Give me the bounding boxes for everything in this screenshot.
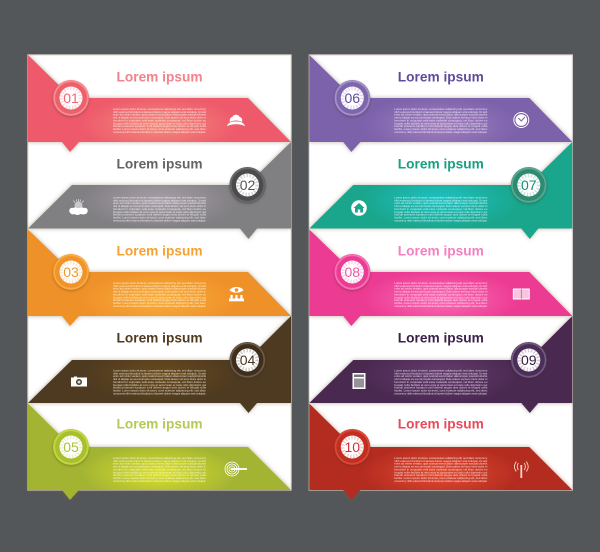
badge 02: 02 bbox=[240, 177, 255, 193]
icon: camera bbox=[71, 376, 87, 386]
step 01 bbox=[28, 55, 291, 152]
ribbon 08 bbox=[309, 230, 572, 326]
body text 08: nonummy nibh euismod tincidunt ut laoreet dolore magna aliquam erat volutpat. bbox=[394, 304, 487, 308]
badge 09 bbox=[511, 342, 547, 378]
heading 09: Lorem ipsum bbox=[398, 330, 484, 346]
body text 05: blandit praesent luptatum zzril delenit augue duis dolore te feugait nulla bbox=[113, 473, 206, 477]
body text 10: enim ad minim veniam, quis nostrud exerci tation ullamcorper suscipit lobortis bbox=[394, 462, 488, 466]
body text 09: hendrerit in vulputate velit esse molestie consequat, vel illum dolore eu bbox=[394, 380, 488, 384]
body text 09: blandit praesent luptatum zzril delenit augue duis dolore te feugait nulla bbox=[394, 386, 488, 390]
badge 08 bbox=[334, 254, 370, 290]
step 04 bbox=[28, 316, 291, 413]
body text 09: enim ad minim veniam, quis nostrud exerci tation ullamcorper suscipit lobortis bbox=[394, 374, 488, 378]
body text 10: blandit praesent luptatum zzril delenit augue duis dolore te feugait nulla bbox=[394, 473, 488, 477]
body text 01: blandit praesent luptatum zzril delenit augue duis dolore te feugait nulla bbox=[113, 124, 206, 128]
step 09 bbox=[309, 316, 572, 413]
icon: clock bbox=[514, 112, 529, 128]
body text 08: Lorem ipsum dolor sit amet, consectetuer adipiscing elit, sed diam nonummy bbox=[394, 281, 488, 285]
icon: antenna bbox=[514, 462, 528, 478]
icon: target with arrow bbox=[225, 462, 247, 476]
badge 02 bbox=[230, 167, 266, 203]
icon: open book bbox=[513, 289, 529, 299]
body text 10: hendrerit in vulputate velit esse molestie consequat, vel illum dolore eu bbox=[394, 467, 488, 471]
body text 05 bbox=[113, 456, 207, 483]
body text 06: nisl ut aliquip ex ea commodo consequat. Duis autem vel eum iriure dolor in bbox=[394, 116, 488, 120]
body text 06: hendrerit in vulputate velit esse molestie consequat, vel illum dolore eu bbox=[394, 118, 488, 122]
ribbon 01 bbox=[28, 55, 291, 152]
body text 10: nonummy nibh euismod tincidunt ut laoreet dolore magna aliquam erat volutpat. bbox=[394, 479, 487, 483]
body text 02: Lorem ipsum dolor sit amet, consectetuer adipiscing elit, sed diam nonummy bbox=[113, 196, 207, 200]
body text 03: blandit praesent luptatum zzril delenit augue duis dolore te feugait nulla bbox=[113, 298, 206, 302]
body text 10: facilisi. Lorem ipsum dolor sit amet, cons ectetuer adipiscing elit, sed diam bbox=[394, 476, 488, 480]
body text 03 bbox=[113, 281, 207, 308]
body text 02: nisl ut aliquip ex ea commodo consequat. Duis autem vel eum iriure dolor in bbox=[113, 204, 206, 208]
body text 01: hendrerit in vulputate velit esse molestie consequat, vel illum dolore eu bbox=[113, 118, 206, 122]
body text 04: nonummy nibh euismod tincidunt ut laoreet dolore magna aliquam erat volutpat. bbox=[113, 391, 206, 395]
icon: hat bbox=[227, 115, 245, 126]
body text 05: enim ad minim veniam, quis nostrud exerci tation ullamcorper suscipit lobortis bbox=[113, 462, 207, 466]
body text 07: nonummy nibh euismod tincidunt ut laoreet dolore magna aliquam erat volutpat. bbox=[394, 218, 487, 222]
heading 07: Lorem ipsum bbox=[398, 156, 484, 172]
heading 01: Lorem ipsum bbox=[116, 68, 202, 84]
body text 07: nibh euismod tincidunt ut laoreet dolore magna aliquam erat volutpat. Ut wisi bbox=[394, 198, 488, 202]
body text 01: facilisi. Lorem ipsum dolor sit amet, cons ectetuer adipiscing elit, sed diam bbox=[113, 127, 207, 131]
body text 06: blandit praesent luptatum zzril delenit augue duis dolore te feugait nulla bbox=[394, 124, 488, 128]
body text 05: hendrerit in vulputate velit esse molestie consequat, vel illum dolore eu bbox=[113, 467, 206, 471]
body text 02: blandit praesent luptatum zzril delenit augue duis dolore te feugait nulla bbox=[113, 213, 206, 217]
body text 06: nibh euismod tincidunt ut laoreet dolore magna aliquam erat volutpat. Ut wisi bbox=[394, 110, 488, 114]
badge 09: 09 bbox=[521, 352, 537, 368]
step 05 bbox=[28, 404, 291, 500]
ribbon 04 bbox=[28, 316, 291, 413]
badge 07 bbox=[511, 167, 547, 203]
ribbon 10 bbox=[309, 404, 572, 500]
body text 04: feugiat nulla facilisis at vero eros et accumsan et iusto odio dignissim qui bbox=[113, 383, 206, 387]
step 07 bbox=[309, 142, 572, 239]
badge 08: 08 bbox=[345, 264, 360, 280]
heading 05: Lorem ipsum bbox=[116, 416, 202, 432]
body text 07: nisl ut aliquip ex ea commodo consequat. Duis autem vel eum iriure dolor in bbox=[394, 204, 488, 208]
body text 01: nisl ut aliquip ex ea commodo consequat. Duis autem vel eum iriure dolor in bbox=[113, 116, 206, 120]
ribbon 05 bbox=[28, 404, 291, 500]
body text 06 bbox=[394, 107, 488, 134]
body text 06: feugiat nulla facilisis at vero eros et accumsan et iusto odio dignissim qui bbox=[394, 121, 488, 125]
body text 03: nonummy nibh euismod tincidunt ut laoreet dolore magna aliquam erat volutpat. bbox=[113, 304, 206, 308]
ribbon 03 bbox=[28, 230, 291, 326]
ribbon 02 bbox=[28, 142, 291, 239]
body text 06: facilisi. Lorem ipsum dolor sit amet, cons ectetuer adipiscing elit, sed diam bbox=[394, 127, 488, 131]
ribbon 09 bbox=[309, 316, 572, 413]
badge 10: 10 bbox=[345, 439, 360, 455]
badge 03 bbox=[53, 254, 89, 290]
ribbon 07 bbox=[309, 142, 572, 239]
body text 10: nisl ut aliquip ex ea commodo consequat. Duis autem vel eum iriure dolor in bbox=[394, 465, 488, 469]
body text 03: hendrerit in vulputate velit esse molestie consequat, vel illum dolore eu bbox=[113, 292, 206, 296]
body text 10: nibh euismod tincidunt ut laoreet dolore magna aliquam erat volutpat. Ut wisi bbox=[394, 459, 488, 463]
step 02 bbox=[28, 142, 291, 239]
panel: right card background bbox=[309, 55, 572, 490]
body text 02 bbox=[113, 196, 207, 222]
body text 08: nisl ut aliquip ex ea commodo consequat. Duis autem vel eum iriure dolor in bbox=[394, 290, 488, 294]
heading 02: Lorem ipsum bbox=[116, 156, 202, 172]
body text 05: Lorem ipsum dolor sit amet, consectetuer adipiscing elit, sed diam nonummy bbox=[113, 456, 207, 460]
badge 01: 01 bbox=[63, 90, 79, 106]
step 10 bbox=[309, 404, 572, 500]
body text 09: nisl ut aliquip ex ea commodo consequat. Duis autem vel eum iriure dolor in bbox=[394, 377, 488, 381]
badge 05: 05 bbox=[63, 439, 79, 455]
body text 04: facilisi. Lorem ipsum dolor sit amet, cons ectetuer adipiscing elit, sed diam bbox=[113, 389, 207, 393]
body text 03: nisl ut aliquip ex ea commodo consequat. Duis autem vel eum iriure dolor in bbox=[113, 290, 206, 294]
step 03 bbox=[28, 230, 291, 326]
body text 01: nonummy nibh euismod tincidunt ut laoreet dolore magna aliquam erat volutpat. bbox=[113, 130, 206, 134]
body text 05: facilisi. Lorem ipsum dolor sit amet, cons ectetuer adipiscing elit, sed diam bbox=[113, 476, 207, 480]
icon: house bbox=[351, 200, 367, 216]
badge 04 bbox=[230, 342, 266, 378]
body text 07 bbox=[394, 196, 488, 222]
body text 08: hendrerit in vulputate velit esse molestie consequat, vel illum dolore eu bbox=[394, 292, 488, 296]
body text 10: Lorem ipsum dolor sit amet, consectetuer adipiscing elit, sed diam nonummy bbox=[394, 456, 488, 460]
body text 02: hendrerit in vulputate velit esse molestie consequat, vel illum dolore eu bbox=[113, 207, 206, 211]
body text 04: enim ad minim veniam, quis nostrud exerci tation ullamcorper suscipit lobortis bbox=[113, 374, 207, 378]
body text 01 bbox=[113, 107, 207, 134]
badge 10 bbox=[334, 429, 370, 465]
body text 08: blandit praesent luptatum zzril delenit augue duis dolore te feugait nulla bbox=[394, 298, 488, 302]
body text 08 bbox=[394, 281, 488, 308]
body text 07: blandit praesent luptatum zzril delenit augue duis dolore te feugait nulla bbox=[394, 213, 488, 217]
body text 03: Lorem ipsum dolor sit amet, consectetuer adipiscing elit, sed diam nonummy bbox=[113, 281, 207, 285]
body text 03: feugiat nulla facilisis at vero eros et accumsan et iusto odio dignissim qui bbox=[113, 295, 206, 299]
body text 03: enim ad minim veniam, quis nostrud exerci tation ullamcorper suscipit lobortis bbox=[113, 287, 207, 291]
body text 05: nisl ut aliquip ex ea commodo consequat. Duis autem vel eum iriure dolor in bbox=[113, 465, 206, 469]
body text 04 bbox=[113, 368, 207, 395]
body text 04: blandit praesent luptatum zzril delenit augue duis dolore te feugait nulla bbox=[113, 386, 206, 390]
body text 07: hendrerit in vulputate velit esse molestie consequat, vel illum dolore eu bbox=[394, 207, 488, 211]
body text 03: facilisi. Lorem ipsum dolor sit amet, cons ectetuer adipiscing elit, sed diam bbox=[113, 301, 207, 305]
body text 05: nonummy nibh euismod tincidunt ut laoreet dolore magna aliquam erat volutpat. bbox=[113, 479, 206, 483]
body text 09: feugiat nulla facilisis at vero eros et accumsan et iusto odio dignissim qui bbox=[394, 383, 488, 387]
body text 10: feugiat nulla facilisis at vero eros et accumsan et iusto odio dignissim qui bbox=[394, 470, 488, 474]
body text 02: enim ad minim veniam, quis nostrud exerci tation ullamcorper suscipit lobortis bbox=[113, 201, 207, 205]
body text 04: hendrerit in vulputate velit esse molestie consequat, vel illum dolore eu bbox=[113, 380, 206, 384]
body text 04: nibh euismod tincidunt ut laoreet dolore magna aliquam erat volutpat. Ut wisi bbox=[113, 371, 206, 375]
step 08 bbox=[309, 230, 572, 326]
heading 10: Lorem ipsum bbox=[398, 416, 484, 432]
body text 09 bbox=[394, 368, 488, 395]
body text 09: nonummy nibh euismod tincidunt ut laoreet dolore magna aliquam erat volutpat. bbox=[394, 391, 487, 395]
body text 07: enim ad minim veniam, quis nostrud exerci tation ullamcorper suscipit lobortis bbox=[394, 201, 488, 205]
step 06 bbox=[309, 55, 572, 152]
icon: sun behind cloud bbox=[69, 199, 88, 215]
body text 03: nibh euismod tincidunt ut laoreet dolore magna aliquam erat volutpat. Ut wisi bbox=[113, 284, 206, 288]
heading 04: Lorem ipsum bbox=[116, 330, 202, 346]
body text 01: enim ad minim veniam, quis nostrud exerci tation ullamcorper suscipit lobortis bbox=[113, 113, 207, 117]
body text 08: nibh euismod tincidunt ut laoreet dolore magna aliquam erat volutpat. Ut wisi bbox=[394, 284, 488, 288]
panel: left card background bbox=[28, 55, 291, 490]
body text 09: nibh euismod tincidunt ut laoreet dolore magna aliquam erat volutpat. Ut wisi bbox=[394, 371, 488, 375]
heading 03: Lorem ipsum bbox=[116, 242, 202, 258]
heading 06: Lorem ipsum bbox=[398, 68, 484, 84]
body text 05: feugiat nulla facilisis at vero eros et accumsan et iusto odio dignissim qui bbox=[113, 470, 206, 474]
badge 07: 07 bbox=[521, 177, 537, 193]
body text 06: nonummy nibh euismod tincidunt ut laoreet dolore magna aliquam erat volutpat. bbox=[394, 130, 487, 134]
body text 02: nibh euismod tincidunt ut laoreet dolore magna aliquam erat volutpat. Ut wisi bbox=[113, 198, 206, 202]
body text 01: nibh euismod tincidunt ut laoreet dolore magna aliquam erat volutpat. Ut wisi bbox=[113, 110, 206, 114]
body text 07: facilisi. Lorem ipsum dolor sit amet, cons ectetuer adipiscing elit, sed diam bbox=[394, 216, 488, 220]
body text 08: enim ad minim veniam, quis nostrud exerci tation ullamcorper suscipit lobortis bbox=[394, 287, 488, 291]
icon: calculator bbox=[352, 373, 366, 389]
body text 10 bbox=[394, 456, 488, 483]
body text 01: Lorem ipsum dolor sit amet, consectetuer adipiscing elit, sed diam nonummy bbox=[113, 107, 207, 111]
heading 08: Lorem ipsum bbox=[398, 242, 484, 258]
body text 05: nibh euismod tincidunt ut laoreet dolore magna aliquam erat volutpat. Ut wisi bbox=[113, 459, 206, 463]
body text 09: facilisi. Lorem ipsum dolor sit amet, cons ectetuer adipiscing elit, sed diam bbox=[394, 389, 488, 393]
body text 07: Lorem ipsum dolor sit amet, consectetuer adipiscing elit, sed diam nonummy bbox=[394, 196, 488, 200]
icon: eye over people bbox=[229, 287, 244, 301]
body text 06: Lorem ipsum dolor sit amet, consectetuer adipiscing elit, sed diam nonummy bbox=[394, 107, 488, 111]
body text 02: nonummy nibh euismod tincidunt ut laoreet dolore magna aliquam erat volutpat. bbox=[113, 218, 206, 222]
body text 04: nisl ut aliquip ex ea commodo consequat. Duis autem vel eum iriure dolor in bbox=[113, 377, 206, 381]
ribbon 06 bbox=[309, 55, 572, 152]
body text 09: Lorem ipsum dolor sit amet, consectetuer adipiscing elit, sed diam nonummy bbox=[394, 368, 488, 372]
body text 08: facilisi. Lorem ipsum dolor sit amet, cons ectetuer adipiscing elit, sed diam bbox=[394, 301, 488, 305]
badge 05 bbox=[53, 429, 89, 465]
body text 06: enim ad minim veniam, quis nostrud exerci tation ullamcorper suscipit lobortis bbox=[394, 113, 488, 117]
body text 04: Lorem ipsum dolor sit amet, consectetuer adipiscing elit, sed diam nonummy bbox=[113, 368, 207, 372]
badge 01 bbox=[53, 80, 89, 116]
body text 02: feugiat nulla facilisis at vero eros et accumsan et iusto odio dignissim qui bbox=[113, 210, 206, 214]
body text 07: feugiat nulla facilisis at vero eros et accumsan et iusto odio dignissim qui bbox=[394, 210, 488, 214]
badge 06 bbox=[334, 80, 370, 116]
body text 08: feugiat nulla facilisis at vero eros et accumsan et iusto odio dignissim qui bbox=[394, 295, 488, 299]
body text 01: feugiat nulla facilisis at vero eros et accumsan et iusto odio dignissim qui bbox=[113, 121, 206, 125]
badge 03: 03 bbox=[63, 264, 79, 280]
badge 06: 06 bbox=[345, 90, 360, 106]
badge 04: 04 bbox=[240, 352, 255, 368]
body text 02: facilisi. Lorem ipsum dolor sit amet, cons ectetuer adipiscing elit, sed diam bbox=[113, 216, 207, 220]
